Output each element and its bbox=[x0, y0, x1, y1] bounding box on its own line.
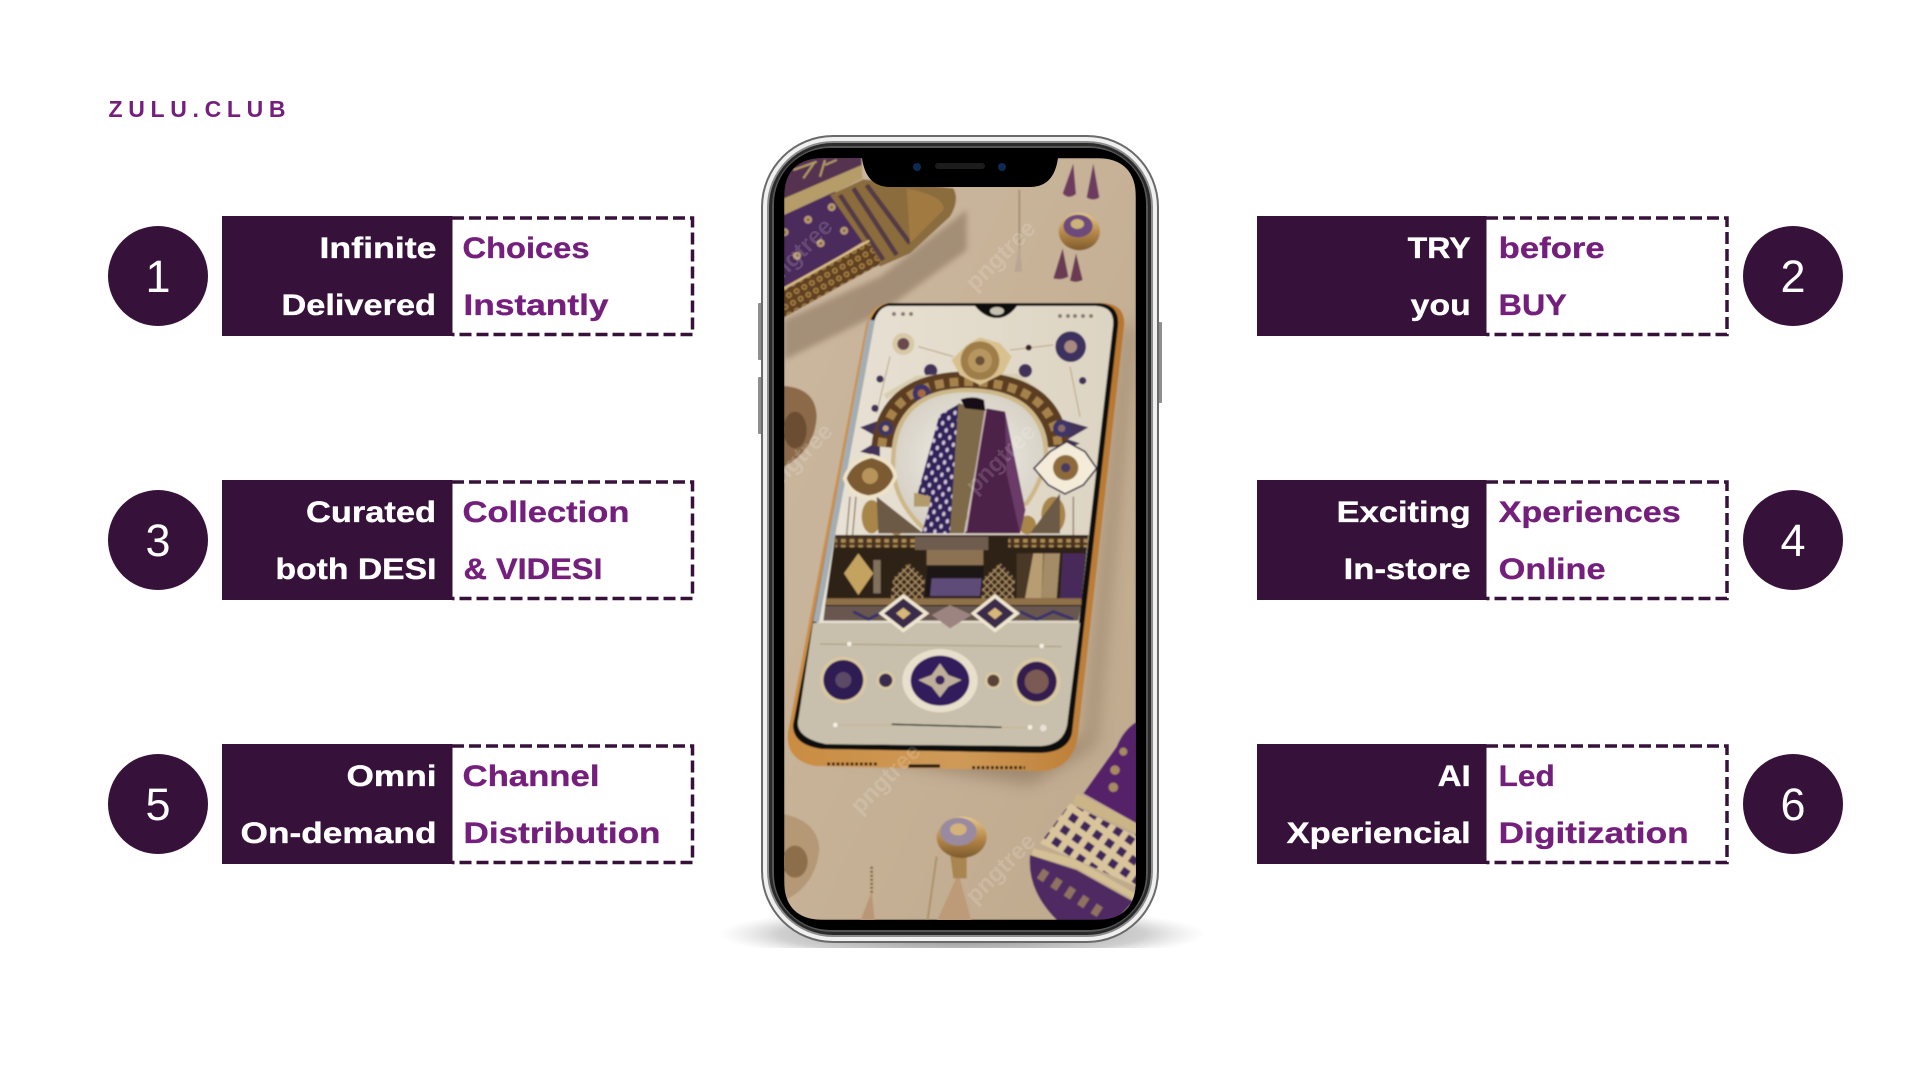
top scene: fabric roll and earrings bbox=[783, 157, 1100, 467]
right flower medallion bbox=[1034, 442, 1097, 494]
stock watermark marks: pngtree bbox=[960, 418, 1041, 499]
dark label block: TRY bbox=[1408, 232, 1471, 265]
number badge 6 bbox=[1743, 754, 1843, 854]
purple text: Xperiences bbox=[1499, 496, 1681, 529]
item 4: Exciting Xperiences In-store Online bbox=[1257, 480, 1843, 600]
purple text bbox=[1499, 760, 1689, 850]
diamond ornaments bbox=[878, 594, 929, 633]
purple text: Distribution bbox=[464, 817, 660, 850]
item 5: Omni Channel On-demand Distribution bbox=[108, 744, 692, 864]
purple text bbox=[462, 760, 660, 850]
number badge 2: 2 bbox=[1780, 251, 1806, 302]
top roundels bbox=[892, 333, 914, 355]
dark label block bbox=[1257, 744, 1486, 864]
stock watermark marks: pngtree bbox=[960, 828, 1041, 909]
number badge 5: 5 bbox=[145, 779, 171, 830]
number badge 3 bbox=[108, 490, 208, 590]
dark label block: Xperiencial bbox=[1287, 817, 1471, 850]
top medallion bbox=[952, 337, 1012, 385]
dark label block: AI bbox=[1438, 760, 1471, 793]
purple text: Led bbox=[1499, 760, 1555, 793]
phone metal frame bbox=[761, 135, 1159, 943]
left tan roll bbox=[784, 386, 817, 467]
dark label block bbox=[222, 216, 452, 336]
dashed box bbox=[1486, 482, 1727, 598]
dashed box bbox=[452, 482, 692, 598]
dark label block: Omni bbox=[346, 760, 436, 793]
purple text: Instantly bbox=[464, 289, 609, 322]
purple text: & VIDESI bbox=[464, 553, 602, 586]
purple text: Collection bbox=[462, 496, 630, 529]
dashed box bbox=[1486, 746, 1727, 862]
dark label block: you bbox=[1411, 289, 1471, 322]
purple text: Online bbox=[1499, 553, 1606, 586]
dashed box bbox=[452, 746, 692, 862]
number badge 6: 6 bbox=[1780, 779, 1806, 830]
item 2: TRY before you BUY bbox=[1257, 216, 1843, 336]
number badge 1 bbox=[108, 226, 208, 326]
inner phone screen bbox=[798, 306, 1113, 746]
inner tilted phone bbox=[788, 303, 1135, 785]
dark label block: Curated bbox=[306, 496, 436, 529]
stock watermark marks: pngtree bbox=[757, 418, 838, 499]
inner app artwork: buttons and bottom objects bbox=[782, 642, 1137, 922]
number badge 5 bbox=[108, 754, 208, 854]
front camera and speaker bbox=[913, 163, 1006, 171]
purple text bbox=[1499, 496, 1681, 586]
dashed box bbox=[1486, 218, 1727, 334]
purple text: BUY bbox=[1499, 289, 1567, 322]
phone screen artwork bbox=[757, 157, 1137, 922]
purple text bbox=[462, 496, 630, 586]
earrings top right bbox=[1063, 163, 1076, 197]
arch spikes bbox=[860, 364, 1088, 457]
phone floor shadow bbox=[734, 918, 1190, 948]
dark label block bbox=[1257, 216, 1486, 336]
garment bbox=[917, 404, 960, 534]
purple text: Digitization bbox=[1499, 817, 1689, 850]
item 3: Curated Collection both DESI & VIDESI bbox=[108, 480, 692, 600]
left flower medallion bbox=[843, 454, 897, 499]
purple text: before bbox=[1499, 232, 1605, 265]
app buttons bbox=[820, 644, 1062, 647]
purple text bbox=[1499, 232, 1605, 322]
bottom left tan roll bbox=[784, 814, 819, 901]
dark label block bbox=[222, 744, 452, 864]
number badge 1: 1 bbox=[145, 251, 171, 302]
item 1: Infinite Choices Delivered Instantly bbox=[108, 216, 692, 336]
dark label block: Delivered bbox=[282, 289, 436, 322]
number badge 4 bbox=[1743, 490, 1843, 590]
bottom pin and tassels bbox=[870, 866, 874, 894]
dark label block: In-store bbox=[1344, 553, 1471, 586]
stock watermark marks: pngtree bbox=[845, 738, 926, 819]
dark label block: Infinite bbox=[320, 232, 436, 265]
brand title: ZULU.CLUB bbox=[108, 96, 286, 122]
dark label block: On-demand bbox=[240, 817, 436, 850]
phone side buttons bbox=[758, 303, 1162, 434]
inner phone bezel bbox=[793, 303, 1118, 753]
purple text: Choices bbox=[462, 232, 590, 265]
dashed box bbox=[452, 218, 692, 334]
dark label block: both DESI bbox=[276, 553, 436, 586]
inner screen lower panel bbox=[798, 623, 1080, 746]
status icons bbox=[892, 312, 1093, 318]
stock watermark marks: pngtree bbox=[960, 215, 1041, 296]
dark label block bbox=[1257, 480, 1486, 600]
inner phone body bbox=[788, 303, 1124, 771]
number badge 4: 4 bbox=[1780, 515, 1806, 566]
lace band bbox=[823, 607, 1081, 621]
dark label block: Exciting bbox=[1337, 496, 1471, 529]
stock watermark marks bbox=[757, 213, 1041, 909]
inner app artwork: arch and garment bbox=[823, 331, 1097, 633]
item 6: AI Led Xperiencial Digitization bbox=[1257, 744, 1843, 864]
number badge 3: 3 bbox=[145, 515, 171, 566]
statues bbox=[862, 497, 1065, 535]
inner phone drop shadow bbox=[900, 323, 1136, 790]
purple text: Channel bbox=[462, 760, 600, 793]
phone mockup bbox=[718, 135, 1206, 962]
speaker holes bbox=[827, 764, 1025, 768]
stock watermark marks: pngtree bbox=[757, 213, 838, 294]
arch band bbox=[882, 382, 1058, 447]
mirror ring bbox=[893, 390, 1046, 528]
number badge 2 bbox=[1743, 226, 1843, 326]
shelf bbox=[825, 535, 1088, 607]
dark label block bbox=[222, 480, 452, 600]
purple text bbox=[462, 232, 609, 322]
bottom right vase bbox=[1083, 722, 1137, 823]
